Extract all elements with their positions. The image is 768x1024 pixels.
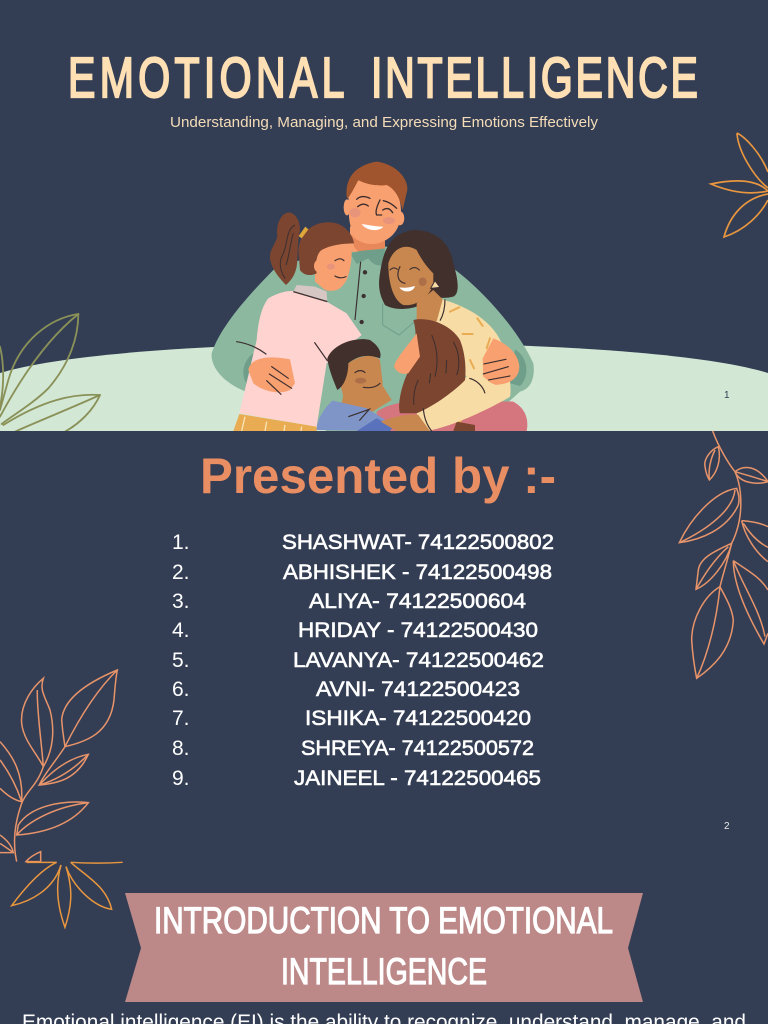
left cuff [243, 354, 254, 384]
ponytail lines [280, 225, 295, 278]
icon: leaf branch right [679, 431, 768, 678]
illustration: hugging family [212, 162, 534, 431]
boy hair [327, 339, 381, 390]
girl collar [293, 285, 327, 302]
man cheeks [349, 208, 395, 224]
man neck [350, 227, 385, 255]
list names: SHREYA- 74122500572 [301, 737, 534, 760]
list names: SHASHWAT- 74122500802 [282, 531, 554, 554]
daughter face [394, 333, 420, 374]
blue shirt [317, 401, 393, 431]
woman neck [417, 290, 443, 322]
boy features [355, 371, 380, 388]
man body [212, 247, 534, 431]
icon: leaf branch left [0, 670, 117, 862]
man left hand [248, 357, 295, 392]
ribbon heading line 1: INTRODUCTION TO EMOTIONAL [154, 900, 613, 941]
title: EMOTIONAL [68, 45, 344, 110]
icon: orange leaves top right [711, 133, 768, 237]
pink sweater [239, 291, 362, 427]
girl features [327, 259, 346, 278]
girl ponytail [270, 213, 300, 285]
long hair lines [414, 335, 459, 405]
numbered list of presenters [172, 531, 554, 790]
sweater pattern [449, 306, 491, 422]
girl hair [298, 222, 354, 275]
page number 1: 1 [724, 390, 730, 401]
skirt stripes [242, 417, 302, 431]
blue shirt lines [348, 409, 369, 421]
woman face [388, 247, 433, 305]
yellow sweater [413, 299, 511, 431]
girl face [315, 244, 352, 291]
list names: LAVANYA- 74122500462 [293, 649, 544, 672]
boy face [340, 356, 383, 405]
man neck shadow [352, 235, 385, 252]
man face [348, 178, 401, 244]
list numbers: 3. [172, 590, 190, 613]
man hair [346, 162, 407, 210]
hair band [299, 227, 308, 238]
ribbon banner [125, 893, 643, 1002]
woman skirt [377, 400, 527, 431]
right hand fingers [483, 359, 510, 380]
pink sweater lines [237, 342, 327, 361]
bottom hand [381, 415, 430, 431]
shirt details [355, 262, 417, 335]
man features [357, 197, 397, 215]
subtitle: Understanding, Managing, and Expressing Emotions Effectively [170, 114, 598, 131]
title: INTELLIGENCE [371, 45, 698, 110]
list numbers: 6. [172, 678, 190, 701]
man right hand [483, 338, 519, 385]
title [68, 45, 698, 110]
heading: presented by: Presented by :- [200, 448, 556, 504]
list names: JAINEEL - 74122500465 [294, 767, 541, 790]
girl ear [314, 260, 316, 272]
yellow arm [417, 377, 510, 431]
right cuff [510, 349, 526, 386]
ribbon shape [125, 893, 643, 1002]
arm detail [423, 378, 485, 431]
list numbers: 2. [172, 561, 190, 584]
hill background [0, 343, 768, 431]
list numbers: 8. [172, 737, 190, 760]
woman hair [379, 230, 458, 309]
icon: orange leaves bottom left [12, 862, 123, 927]
woman features [390, 267, 427, 286]
yellow skirt [233, 414, 317, 431]
man ears [344, 199, 404, 225]
left hand fingers [267, 367, 292, 394]
list numbers: 1. [172, 531, 190, 554]
hair bottom [453, 422, 475, 431]
list numbers [172, 531, 190, 790]
boy neck [342, 387, 392, 413]
earring [431, 281, 440, 288]
sweater collar line [440, 299, 445, 321]
page number 2: 2 [724, 821, 730, 832]
list names: ABHISHEK - 74122500498 [283, 561, 552, 584]
man mouth [362, 224, 383, 230]
list numbers: 7. [172, 707, 190, 730]
list names: ALIYA- 74122500604 [309, 590, 526, 613]
blue shirt shade [357, 418, 393, 431]
woman mouth [399, 286, 415, 291]
icon: green leaves top left [0, 314, 100, 432]
ribbon heading line 2: INTELLIGENCE [281, 951, 487, 992]
list names: HRIDAY - 74122500430 [298, 619, 538, 642]
long hair [399, 319, 465, 413]
list numbers: 5. [172, 649, 190, 672]
list numbers: 4. [172, 619, 190, 642]
list names: ISHIKA- 74122500420 [305, 707, 531, 730]
collar [350, 248, 385, 265]
list numbers: 9. [172, 767, 190, 790]
list names: AVNI- 74122500423 [316, 678, 520, 701]
list names [282, 531, 554, 790]
